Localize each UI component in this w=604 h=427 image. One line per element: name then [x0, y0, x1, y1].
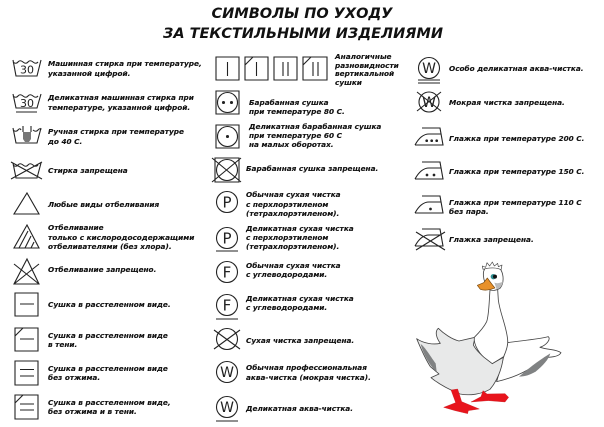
text: vertical drying: вертикальной: [335, 69, 394, 78]
column: washing, bleaching, drying: [11, 59, 202, 419]
text: machine wash: [48, 59, 202, 78]
icon: vertical drying squares: [216, 57, 327, 80]
text: iron 110: [449, 198, 582, 216]
goose beak: [477, 278, 495, 290]
text: vertical drying: Аналогичные: [334, 52, 392, 61]
icon: delicate machine wash 30: 30: [20, 97, 34, 110]
icon: delicate tumble dry: [216, 125, 239, 148]
icon: dry flat in shade: [15, 328, 38, 351]
text: dry clean F: с углеводородами.: [246, 270, 327, 279]
text: no washing: Стирка запрещена: [48, 166, 128, 175]
icon: no dry clean: [214, 328, 240, 350]
text: delicate dry clean F: [245, 294, 354, 312]
text: delicate machine wash: [47, 93, 194, 112]
text: machine wash: Машинная стирка при температуре,: [48, 59, 202, 68]
text: dry flat no spin: без отжима.: [48, 373, 100, 382]
icon: no washing: [11, 162, 42, 179]
text: tumble dry 80: при температуре 80 С.: [249, 107, 345, 116]
icon: delicate wet clean W: [216, 396, 238, 421]
goose eye: [491, 274, 497, 279]
text: wet clean: аква-чистка (мокрая чистка).: [246, 373, 371, 382]
icon: delicate machine wash 30: [13, 94, 41, 112]
text: delicate dry clean P: [245, 224, 354, 251]
icon: very delicate wet clean: W: [422, 61, 436, 77]
text: oxygen bleach: только с кислородосодержащими: [48, 233, 194, 242]
text: dry clean F: [246, 261, 341, 279]
icon: very delicate wet clean: [418, 58, 440, 83]
icon: tumble dry 80: [216, 91, 239, 114]
text: oxygen bleach: [48, 223, 194, 251]
icon: no wet clean: W: [422, 95, 436, 111]
text: machine wash: указанной цифрой.: [48, 69, 130, 78]
text: dry flat in shade: в тени.: [48, 340, 77, 349]
icon: iron 110: [415, 196, 443, 213]
text: vertical drying: сушки: [335, 78, 362, 87]
title: СИМВОЛЫ ПО УХОДУ: [212, 6, 393, 22]
text: oxygen bleach: Отбеливание: [48, 223, 104, 232]
goose head shading: [494, 282, 503, 289]
text: oxygen bleach: отбеливателями (без хлора).: [48, 242, 172, 251]
text: no ironing: Глажка запрещена.: [449, 235, 534, 244]
icon: machine wash 30: 30: [20, 64, 34, 76]
text: tumble dry 80: Барабанная сушка: [249, 98, 329, 107]
text: dry flat: Сушка в расстеленном виде.: [48, 300, 171, 309]
icon: machine wash 30: [13, 60, 41, 76]
text: wet clean: Обычная профессиональная: [246, 363, 367, 372]
text: no dry clean: Сухая чистка запрещена.: [246, 336, 354, 345]
title: [163, 6, 443, 42]
text: iron 110: Глажка при температуре 110 С: [449, 198, 582, 207]
text: dry flat no spin in shade: [48, 398, 171, 416]
goose neck and breast: [474, 289, 508, 364]
text: dry flat no spin in shade: без отжима и в тени.: [48, 407, 137, 416]
text: no tumble dry: Барабанная сушка запрещена.: [246, 164, 378, 173]
icon: dry flat: [15, 293, 38, 316]
text: delicate wet clean: Деликатная аква-чистка.: [245, 404, 353, 413]
icon: delicate wet clean W: W: [220, 400, 234, 416]
text: hand wash: [47, 127, 184, 146]
column: vertical and tumble drying, dry cleaning: [212, 52, 399, 421]
icon: bleach triangle: [14, 193, 39, 214]
icon: wet clean W: [216, 362, 238, 382]
text: wet clean: [246, 363, 371, 382]
goose left wing feathers: [421, 344, 437, 372]
text: delicate dry clean P: с перхлорэтиленом: [246, 233, 328, 242]
goose crest: [482, 262, 502, 270]
text: dry clean P: с перхлорэтиленом: [246, 200, 328, 209]
text: delicate dry clean F: с углеводородами.: [246, 303, 327, 312]
text: delicate tumble dry: Деликатная барабанная сушка: [248, 122, 381, 131]
icon: delicate dry clean P: [216, 228, 238, 251]
text: iron 200: Глажка при температуре 200 С.: [449, 134, 584, 143]
text: delicate tumble dry: на малых оборотах.: [249, 140, 334, 149]
text: hand wash: Ручная стирка при температуре: [48, 127, 184, 136]
illustration: goose: [417, 262, 561, 414]
icon: no tumble dry: [212, 158, 241, 182]
text: dry clean P: Обычная сухая чистка: [246, 190, 341, 199]
text: delicate machine wash: Деликатная машинная стирка при: [47, 93, 194, 102]
icon: delicate dry clean F: [216, 294, 238, 319]
text: dry clean P: (тетрахлорэтиленом).: [246, 209, 339, 218]
text: tumble dry 80: [249, 98, 345, 116]
text: iron 150: Глажка при температуре 150 С.: [449, 167, 584, 176]
text: vertical drying: разновидности: [334, 61, 399, 70]
icon: iron 150: [415, 162, 443, 179]
text: delicate tumble dry: при температуре 60 С: [249, 131, 343, 140]
text: dry flat in shade: Сушка в расстеленном виде: [48, 331, 168, 340]
text: iron 110: без пара.: [449, 207, 489, 216]
text: dry clean P: [246, 190, 341, 218]
icon: dry clean F: [216, 262, 238, 282]
goose right wing: [497, 337, 561, 382]
icon: no ironing: [415, 229, 445, 250]
icon: dry flat no spin: [15, 361, 38, 385]
text: dry flat no spin: Сушка в расстеленном виде: [48, 364, 168, 373]
icon: oxygen bleach triangle: [14, 225, 39, 248]
icon: no wet clean: [417, 92, 441, 112]
goose right wing feathers: [519, 353, 550, 377]
text: dry flat no spin in shade: Сушка в расстеленном виде,: [48, 398, 171, 407]
text: any bleach: Любые виды отбеливания: [47, 200, 160, 209]
text: delicate dry clean P: (тетрахлорэтиленом).: [246, 242, 339, 251]
goose feet: [444, 389, 509, 414]
icon: dry clean F: F: [223, 264, 231, 282]
goose body and left wing: [417, 328, 503, 395]
title: ЗА ТЕКСТИЛЬНЫМИ ИЗДЕЛИЯМИ: [163, 26, 443, 42]
text: very delicate wet clean: Особо деликатная аква-чистка.: [449, 64, 584, 73]
text: vertical drying: [334, 52, 399, 87]
goose head: [483, 267, 503, 290]
text: delicate tumble dry: [248, 122, 381, 149]
icon: delicate dry clean F: F: [223, 296, 231, 314]
text: dry flat in shade: [48, 331, 168, 349]
icon: iron 200: [415, 128, 443, 145]
icon: dry flat no spin in shade: [15, 395, 38, 419]
text: no bleach: Отбеливание запрещено.: [48, 265, 156, 274]
text: dry clean F: Обычная сухая чистка: [246, 261, 341, 270]
text: no wet clean: Мокрая чистка запрещена.: [449, 98, 565, 107]
icon: dry clean P: [216, 192, 238, 212]
icon: wet clean W: W: [220, 365, 234, 381]
text: delicate machine wash: температуре, указанной цифрой.: [48, 103, 190, 112]
text: delicate dry clean P: Деликатная сухая чистка: [245, 224, 354, 233]
icon: dry clean P: P: [222, 194, 232, 212]
icon: no bleach: [14, 259, 39, 284]
text: dry flat no spin: [48, 364, 168, 382]
text: delicate dry clean F: Деликатная сухая чистка: [245, 294, 354, 303]
column: wet cleaning and ironing: [415, 58, 584, 250]
text: hand wash: до 40 С.: [47, 137, 82, 146]
icon: delicate dry clean P: P: [222, 230, 232, 248]
icon: hand wash: [13, 126, 41, 143]
